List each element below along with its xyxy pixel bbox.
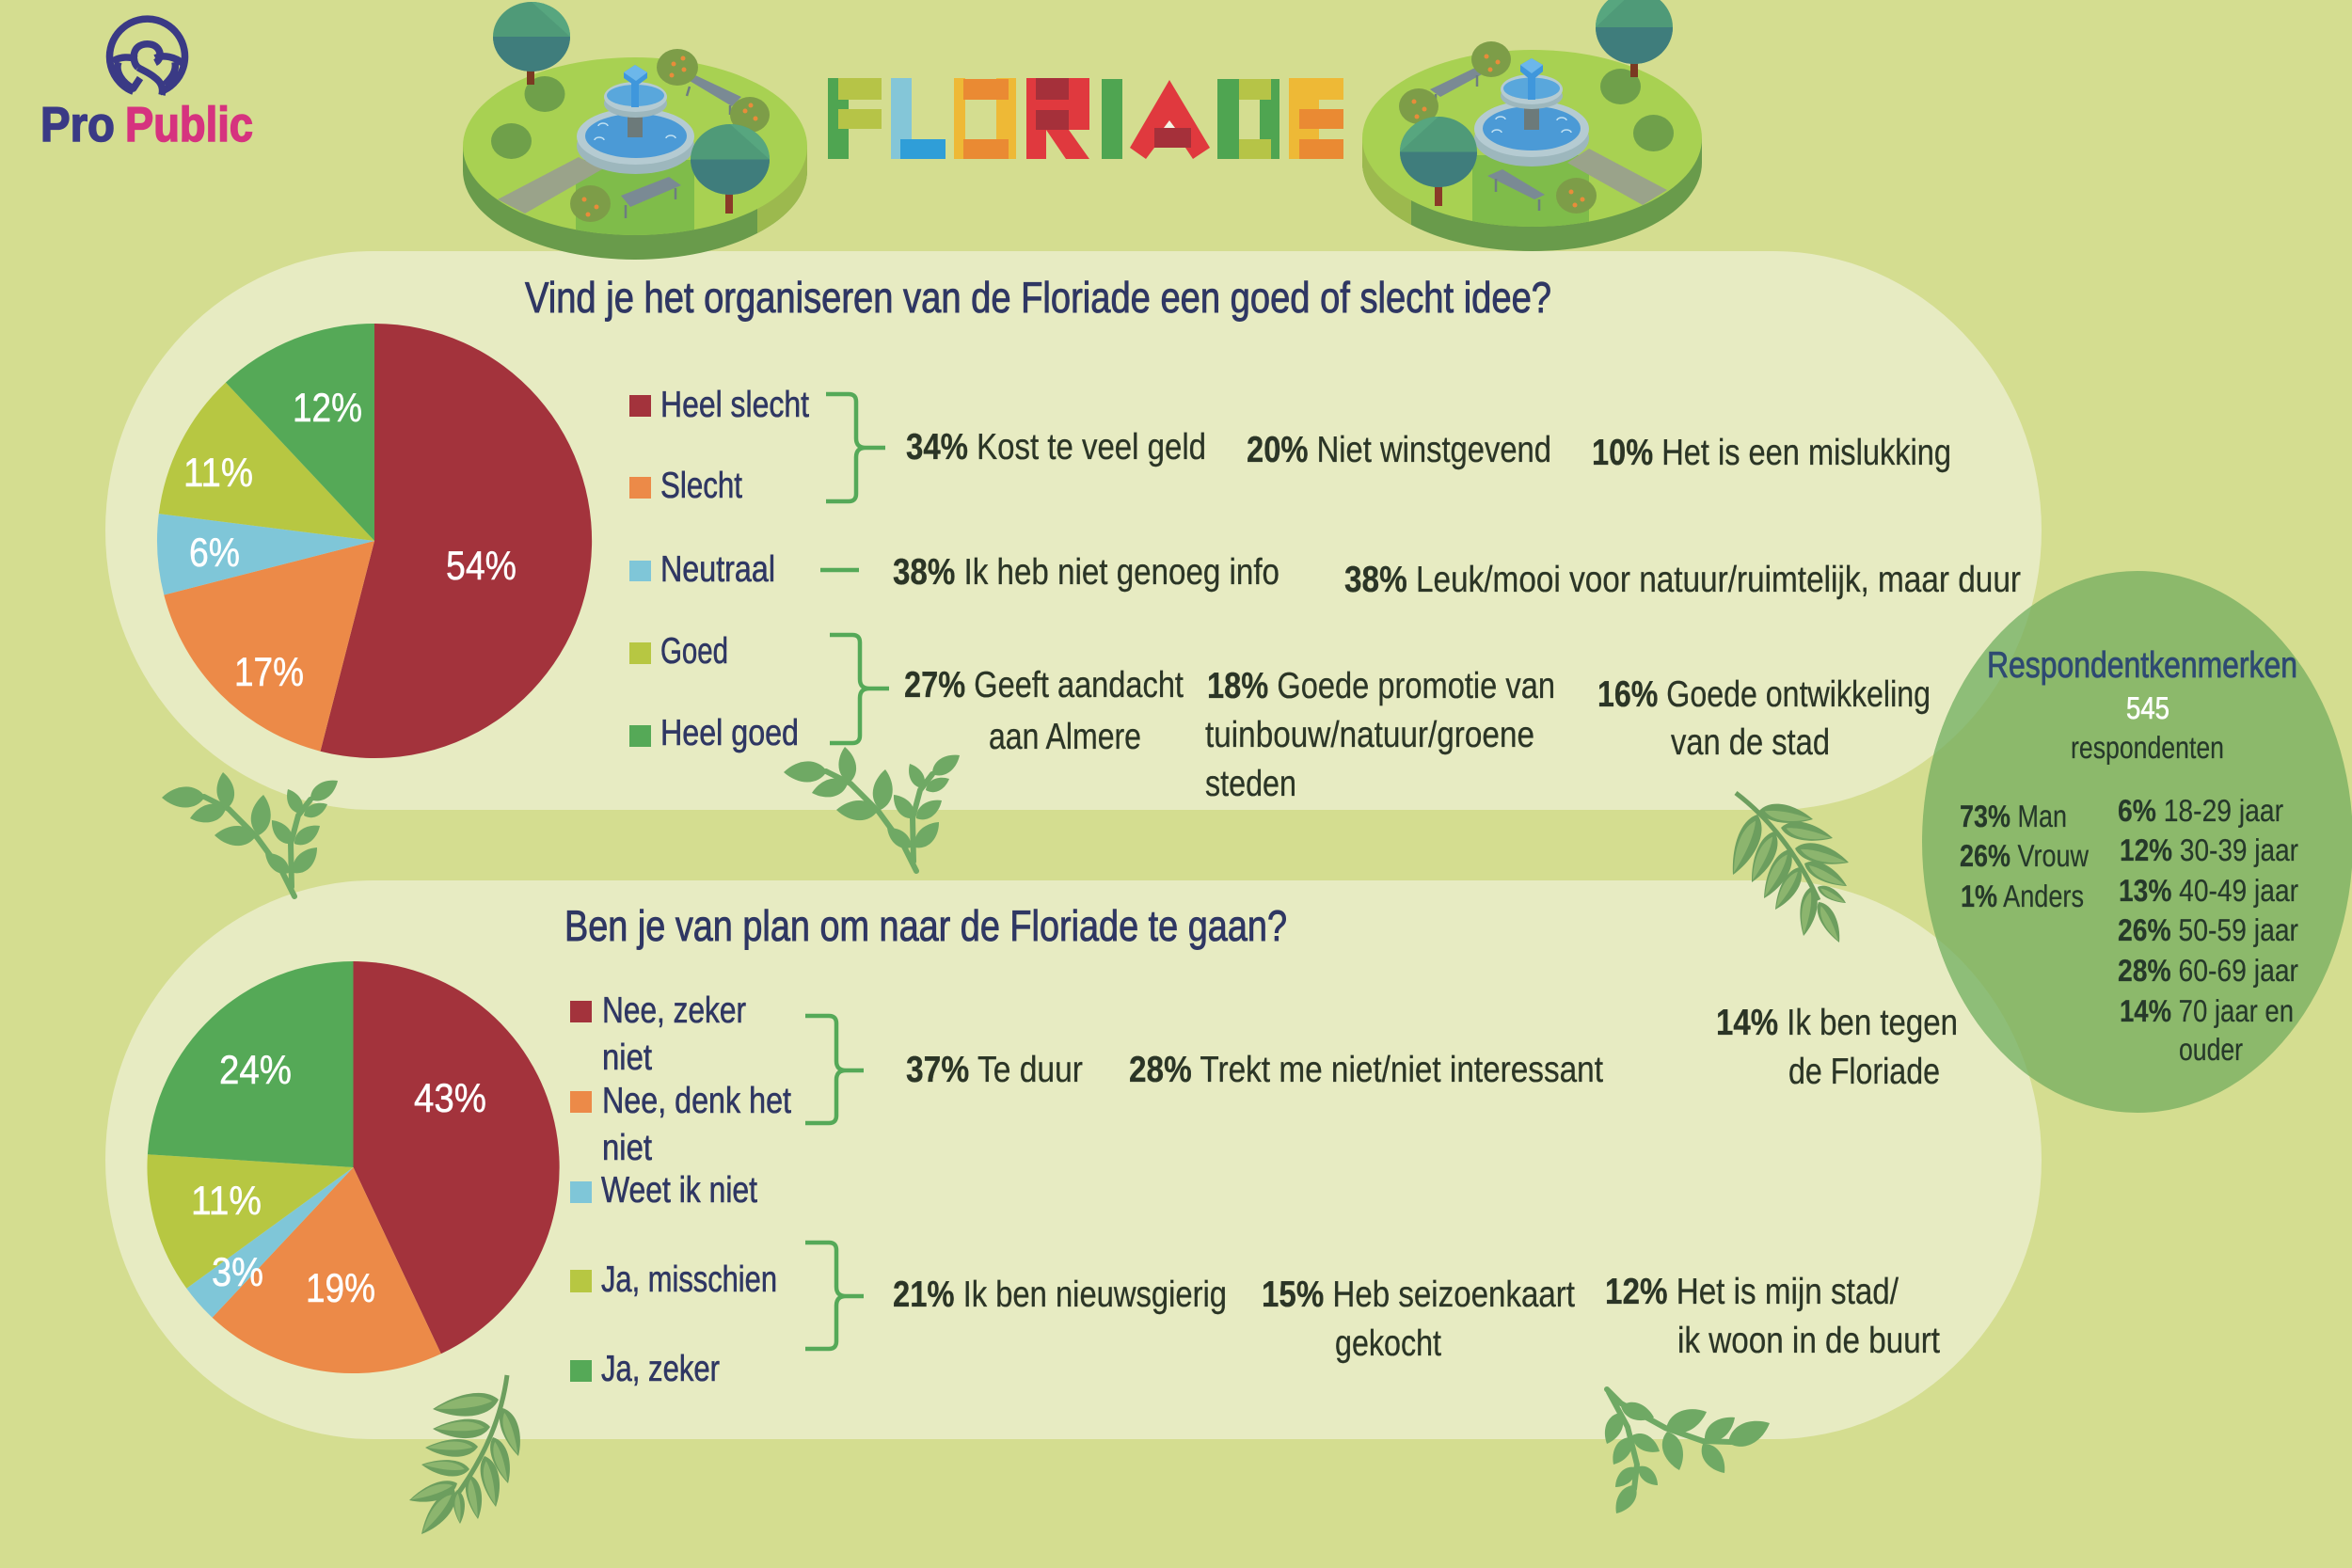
age breakdown: [2118, 793, 2298, 1067]
legend question 1: Slecht: [660, 466, 742, 506]
bracket: yes: [805, 1243, 864, 1349]
letter E: [1289, 78, 1343, 159]
gender breakdown: [1960, 799, 2089, 913]
reasons: no: [906, 1003, 1958, 1092]
legend question 2: [570, 990, 791, 1389]
reasons: no: 28% Trekt me niet/niet interessant: [1129, 1050, 1603, 1090]
reasons: negative: 20% Niet winstgevend: [1247, 430, 1551, 470]
bracket: negative: [826, 394, 885, 501]
age breakdown: 26% 50-59 jaar: [2118, 912, 2298, 947]
pie chart question 1: 6%: [189, 531, 240, 576]
gender breakdown: 26% Vrouw: [1960, 838, 2089, 873]
reasons: positive: van de stad: [1671, 722, 1830, 763]
legend question 2: Ja, zeker: [601, 1349, 720, 1389]
legend question 2: Nee, zeker: [602, 990, 746, 1031]
reasons: yes: 12% Het is mijn stad/: [1605, 1272, 1899, 1312]
leaf frond: top right: [1724, 793, 1851, 945]
gender breakdown: 73% Man: [1960, 799, 2067, 833]
reasons: positive: aan Almere: [989, 717, 1141, 757]
bracket: no: [805, 1016, 864, 1123]
pie chart question 2: 43%: [414, 1076, 486, 1121]
age breakdown: ouder: [2179, 1032, 2243, 1067]
respondent count: [2071, 690, 2224, 765]
leaf frond: bottom left: [406, 1375, 527, 1540]
letter D: [1217, 79, 1279, 159]
legend question 1: Heel slecht: [660, 385, 809, 425]
pie chart question 1: 12%: [293, 386, 362, 431]
reasons: positive: 27% Geeft aandacht: [904, 665, 1184, 705]
reasons: neutral: 38% Ik heb niet genoeg info: [893, 552, 1279, 593]
legend question 2: niet: [602, 1128, 652, 1168]
pie chart question 1: 54%: [446, 544, 516, 589]
legend question 1: Neutraal: [660, 549, 775, 590]
logo wordmark: Public: [125, 98, 253, 152]
reasons: neutral: 38% Leuk/mooi voor natuur/ruimtelijk, maar duur: [1344, 560, 2021, 600]
bracket: positive: [830, 635, 889, 743]
pie chart question 1: 11%: [183, 451, 253, 496]
letter R: [1026, 78, 1089, 159]
reasons: no: 14% Ik ben tegen: [1716, 1003, 1958, 1043]
reasons: negative: [906, 427, 1951, 473]
reasons: positive: [904, 665, 1931, 804]
age breakdown: 13% 40-49 jaar: [2119, 873, 2298, 908]
legend question 2: Nee, denk het: [602, 1081, 791, 1121]
reasons: negative: 10% Het is een mislukking: [1592, 433, 1951, 473]
respondent count: 545: [2126, 690, 2169, 725]
legend question 1: Heel goed: [660, 713, 799, 753]
letter F: [828, 78, 882, 159]
illustration: right park island: [1362, 0, 1702, 256]
leaf sprig: top left: [162, 771, 342, 896]
pie chart question 1: [157, 324, 592, 758]
reasons: no: de Floriade: [1788, 1052, 1940, 1092]
letter O: [954, 78, 1016, 159]
heading question 2: Ben je van plan om naar de Floriade te gaan?: [564, 901, 1287, 950]
illustration: left park island: [463, 2, 807, 263]
pie chart question 1: 17%: [234, 650, 304, 695]
reasons: neutral: [893, 552, 2021, 600]
reasons: positive: tuinbouw/natuur/groene: [1205, 715, 1534, 755]
letter A: [1130, 80, 1210, 159]
age breakdown: 28% 60-69 jaar: [2118, 953, 2298, 988]
leaf sprig: bottom right: [1599, 1389, 1774, 1518]
panel: question 1 background: [105, 251, 2042, 810]
logo wordmark: Pro: [40, 98, 115, 152]
reasons: yes: 15% Heb seizoenkaart: [1262, 1275, 1575, 1315]
legend question 1: [629, 385, 809, 753]
logo: ProPublic: [40, 19, 253, 152]
title: FLORIADE block letters: [828, 78, 1343, 160]
reasons: no: 37% Te duur: [906, 1050, 1083, 1090]
pie chart question 2: 19%: [306, 1266, 375, 1311]
letter I: [1102, 79, 1122, 159]
reasons: positive: steden: [1205, 764, 1296, 804]
reasons: positive: 18% Goede promotie van: [1207, 666, 1555, 706]
age breakdown: 12% 30-39 jaar: [2120, 832, 2298, 867]
respondent count: respondenten: [2071, 730, 2224, 765]
reasons: yes: gekocht: [1335, 1323, 1441, 1364]
panel: question 2 background: [105, 880, 2042, 1439]
reasons: positive: 16% Goede ontwikkeling: [1597, 674, 1931, 715]
reasons: yes: 21% Ik ben nieuwsgierig: [893, 1275, 1227, 1315]
age breakdown: 14% 70 jaar en: [2120, 993, 2294, 1028]
legend question 2: Weet ik niet: [601, 1170, 757, 1211]
age breakdown: 6% 18-29 jaar: [2118, 793, 2283, 828]
logo icon: [110, 19, 185, 95]
pie chart question 2: 24%: [219, 1048, 292, 1093]
letter L: [891, 78, 946, 159]
pie chart question 2: 11%: [191, 1179, 262, 1224]
panel: respondent circle background: [1922, 571, 2352, 1113]
logo wordmark: [40, 98, 253, 152]
legend question 1: Goed: [660, 631, 728, 672]
question 1: [157, 273, 2021, 804]
legend question 2: niet: [602, 1037, 652, 1078]
leaf sprig: top centre: [784, 746, 964, 871]
heading question 1: Vind je het organiseren van de Floriade een goed of slecht idee?: [525, 273, 1551, 322]
reasons: yes: [893, 1272, 1940, 1364]
pie chart question 2: [147, 961, 560, 1373]
question 2: [147, 901, 1958, 1389]
gender breakdown: 1% Anders: [1961, 879, 2084, 913]
pie chart question 2: 3%: [212, 1250, 263, 1295]
respondent characteristics: [1960, 645, 2298, 1067]
reasons: yes: ik woon in de buurt: [1677, 1321, 1940, 1361]
dash: neutral: [820, 568, 859, 572]
reasons: negative: 34% Kost te veel geld: [906, 427, 1206, 467]
legend question 2: Ja, misschien: [601, 1259, 777, 1300]
